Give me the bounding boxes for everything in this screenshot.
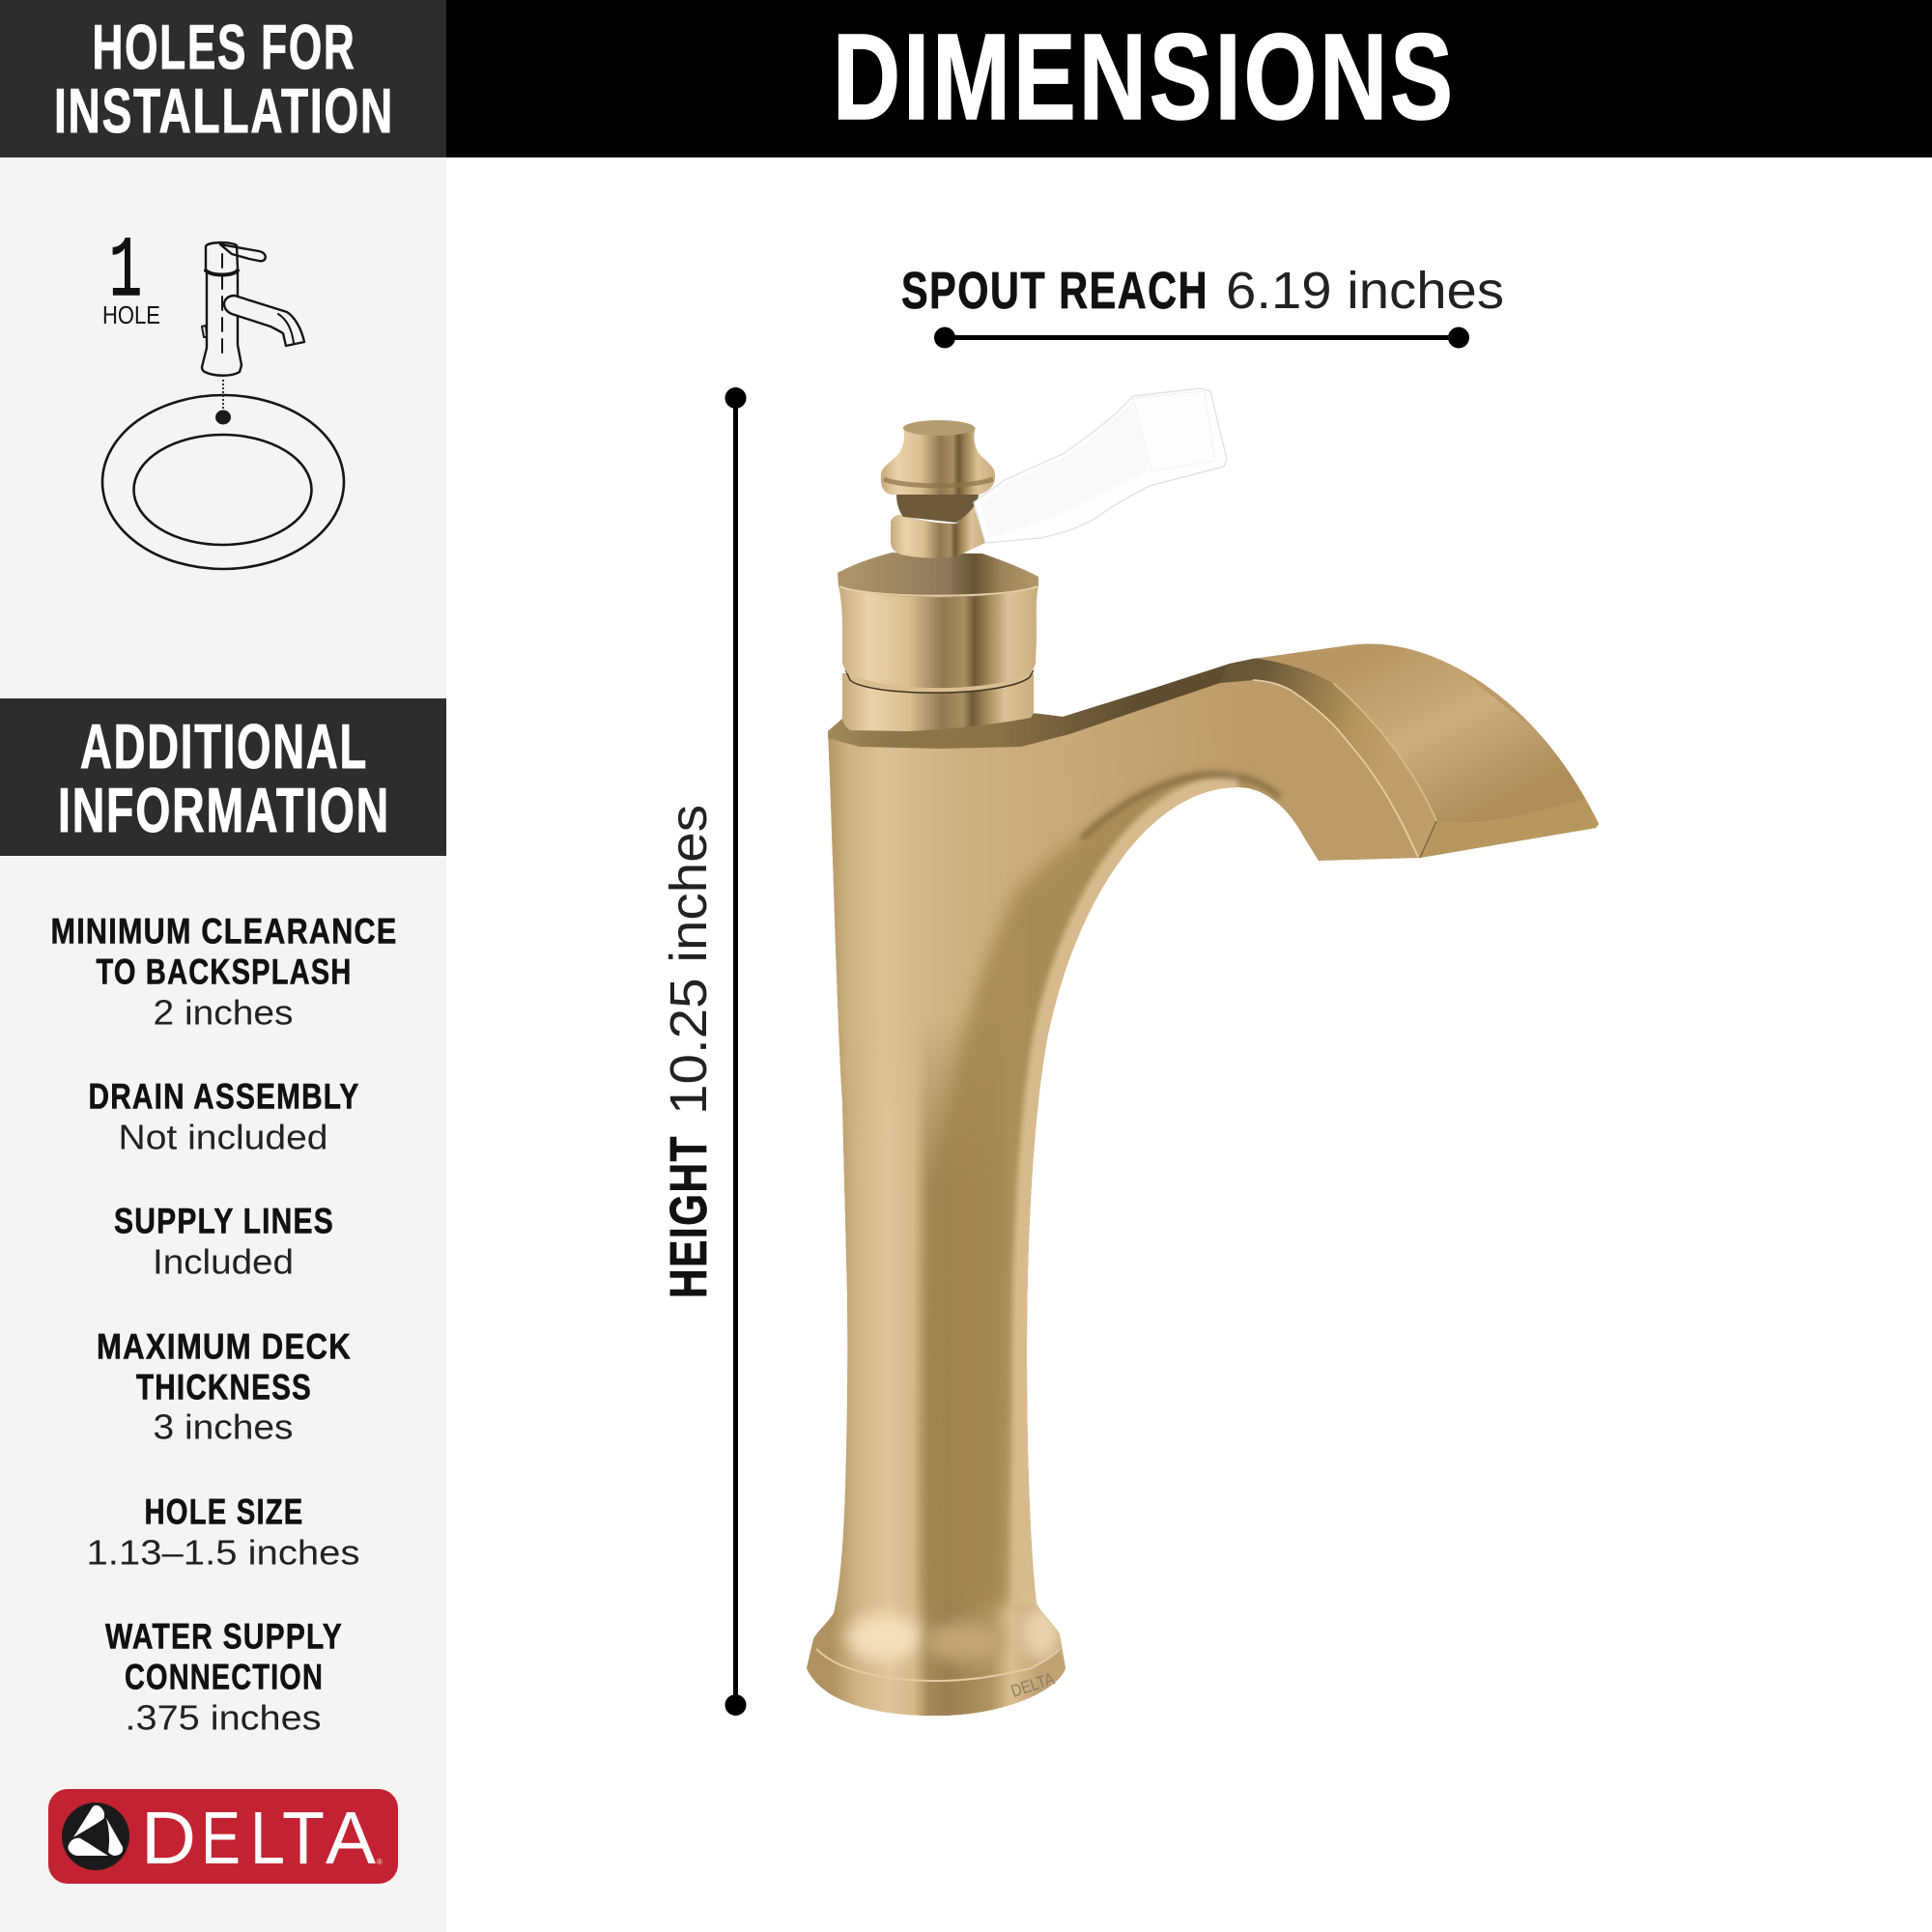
heading: additional information: ADDITIONAL <box>80 711 368 781</box>
logo: delta: D <box>141 1797 196 1880</box>
shoulder bevel <box>821 655 1256 749</box>
text block: water supply connection: WATER SUPPLY <box>105 1617 343 1656</box>
text block: water supply connection: .375 inches <box>126 1698 321 1737</box>
icon: one hole count label: 1 <box>109 225 142 321</box>
heading: holes for installation <box>0 0 446 157</box>
title banner: dimensions: DIMENSIONS <box>833 9 1456 145</box>
spout lower facet <box>1420 799 1604 858</box>
text block: hole size <box>87 1492 359 1573</box>
text block: water supply connection: CONNECTION <box>125 1658 324 1696</box>
heading: holes for installation: INSTALLATION <box>54 75 394 146</box>
text block: minimum clearance: MINIMUM CLEARANCE <box>50 912 398 951</box>
text block: minimum clearance: TO BACKSPLASH <box>97 952 352 991</box>
icon: one hole count label: HOLE <box>102 300 160 329</box>
text block: minimum clearance <box>50 912 398 1032</box>
logo: delta: L <box>250 1797 285 1880</box>
inner silhouette light edge <box>1027 787 1238 1604</box>
logo: delta <box>48 1789 398 1884</box>
faucet handle <box>974 388 1227 543</box>
text block: maximum deck thickness <box>97 1327 352 1447</box>
title banner: dimensions <box>446 0 1932 157</box>
dimension: spout reach <box>901 262 1504 348</box>
dark arc shading <box>924 777 1256 1604</box>
dimension: spout reach: 6.19 inches <box>1226 262 1504 320</box>
dimension: spout reach: SPOUT REACH <box>901 262 1208 320</box>
text block: supply lines <box>114 1202 334 1281</box>
text block: drain assembly: Not included <box>118 1117 328 1157</box>
faucet lower cylinder <box>842 673 1034 731</box>
faucet photo illustration <box>802 388 1623 1719</box>
text block: hole size: HOLE SIZE <box>145 1492 303 1532</box>
spout top face <box>1257 643 1586 823</box>
icon: line-art faucet <box>202 242 304 376</box>
dimension: height <box>660 387 746 1716</box>
icon: sink basin with hole <box>102 380 344 569</box>
dimension: height: HEIGHT <box>660 1135 718 1298</box>
text block: maximum deck thickness: 3 inches <box>153 1406 294 1447</box>
arch crease <box>1082 775 1280 838</box>
text block: drain assembly <box>89 1076 359 1157</box>
faucet upper cylinder <box>838 586 1038 688</box>
text block: maximum deck thickness: MAXIMUM DECK <box>97 1327 352 1366</box>
faucet ring groove <box>846 671 1033 693</box>
spout bevel band <box>1221 658 1366 750</box>
logo: delta: E <box>201 1797 241 1880</box>
text block: supply lines: SUPPLY LINES <box>114 1202 334 1240</box>
text block: minimum clearance: 2 inches <box>153 993 294 1032</box>
heading: additional information: INFORMATION <box>58 775 390 845</box>
logo: delta: T <box>282 1797 325 1880</box>
base lip <box>811 1650 1064 1716</box>
text block: water supply connection <box>105 1617 343 1737</box>
logo: delta: ® <box>377 1858 383 1866</box>
panel: left sidebar <box>0 0 446 1932</box>
faucet dome <box>838 553 1038 597</box>
knob collar <box>891 506 985 558</box>
text block: supply lines: Included <box>153 1242 294 1281</box>
logo: delta: A <box>326 1797 377 1880</box>
faucet body <box>802 638 1623 1719</box>
base lighting <box>847 1614 921 1661</box>
text block: hole size: 1.13–1.5 inches <box>87 1532 359 1573</box>
dimension: height: 10.25 inches <box>660 805 718 1115</box>
heading: additional information <box>0 698 446 856</box>
text block: maximum deck thickness: THICKNESS <box>136 1368 312 1406</box>
knob finial <box>881 421 995 495</box>
text block: drain assembly: DRAIN ASSEMBLY <box>89 1076 359 1117</box>
faucet engraved brand mark: DELTA <box>1009 1669 1057 1701</box>
knob neck <box>896 495 979 523</box>
spout highlight lines <box>1253 680 1436 857</box>
heading: holes for installation: HOLES FOR <box>93 12 355 82</box>
